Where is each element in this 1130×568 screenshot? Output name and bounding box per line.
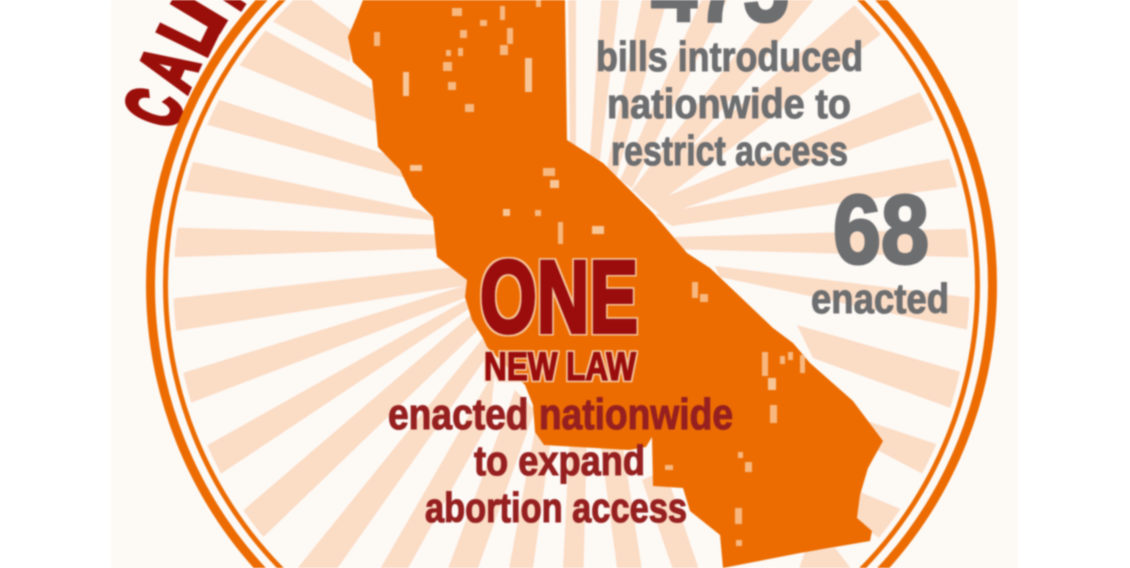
- statistic: 68 enacted: 68: [833, 175, 929, 284]
- statistic: one new law: [388, 240, 733, 531]
- statistic: one new law: ONE: [480, 240, 638, 354]
- statistic: 475 bills: nationwide to: [607, 80, 851, 127]
- title: curved state name: L: [143, 0, 235, 66]
- statistic: 475 bills: [596, 0, 863, 174]
- map distress speckles: [374, 0, 805, 546]
- title: curved state name: C: [108, 79, 201, 137]
- statistic: 68 enacted: [811, 175, 949, 322]
- title: curved state name: A: [122, 35, 215, 101]
- statistic: one new law: abortion access: [425, 484, 687, 531]
- California silhouette: [348, 0, 883, 568]
- title: curved state name: [108, 0, 268, 137]
- statistic: one new law: NEW LAW: [484, 345, 636, 389]
- sunburst rays: [148, 0, 992, 568]
- statistic: 475 bills: bills introduced: [596, 33, 863, 80]
- double ring border: [150, 0, 992, 568]
- statistic: 68 enacted: enacted: [811, 275, 949, 322]
- statistic: one new law: enacted nationwide: [388, 390, 733, 439]
- statistic: one new law: to expand: [474, 437, 645, 484]
- statistic: 475 bills: restrict access: [611, 127, 848, 174]
